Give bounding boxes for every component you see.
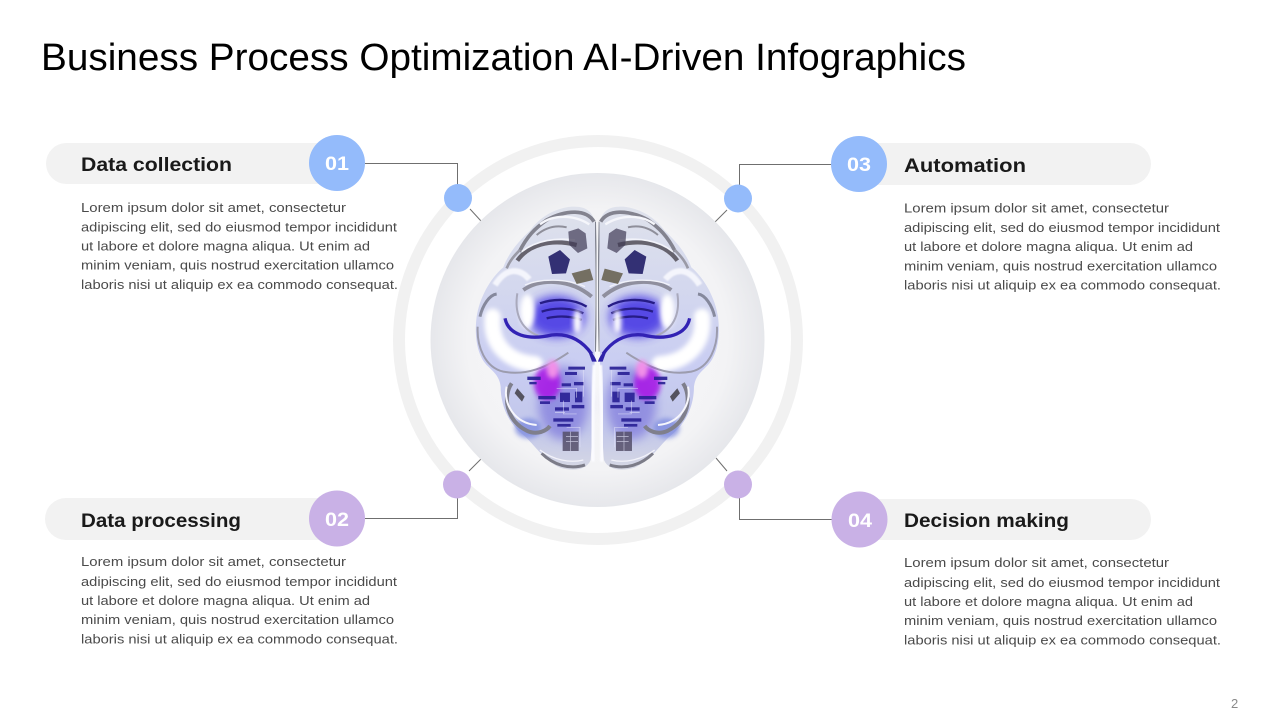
body text: ut labore et dolore magna aliqua. Ut enim ad: [904, 594, 1193, 609]
number badge 03: [831, 136, 887, 192]
number badge 04: [832, 492, 888, 548]
hub dot: bottom right: [724, 470, 752, 498]
connector: node 03 to hub: [715, 164, 832, 222]
body text: laboris nisi ut aliquip ex ea commodo consequat.: [904, 632, 1221, 647]
panel: decision making: [832, 492, 1221, 647]
body text: Lorem ipsum dolor sit amet, consectetur: [904, 200, 1170, 216]
connector: node 04 to hub: [716, 458, 832, 520]
panel: data processing: [45, 490, 398, 646]
heading: Data processing: [81, 510, 241, 532]
body text: [904, 200, 1221, 293]
central circle backdrop: [430, 173, 764, 507]
hub dot: bottom left: [443, 470, 471, 498]
body text: ut labore et dolore magna aliqua. Ut enim ad: [81, 593, 370, 608]
body text: ut labore et dolore magna aliqua. Ut enim ad: [904, 239, 1193, 254]
hub dot: top right: [724, 184, 752, 212]
body text: Lorem ipsum dolor sit amet, consectetur: [904, 555, 1170, 570]
connector: node 01 to hub: [365, 164, 481, 221]
heading pill: [46, 143, 346, 184]
body text: minim veniam, quis nostrud exercitation ullamco: [81, 612, 394, 627]
number badge 04: 04: [848, 511, 872, 532]
heading pill: [851, 499, 1151, 540]
panel: automation: [831, 136, 1221, 293]
body text: minim veniam, quis nostrud exercitation ullamco: [904, 258, 1217, 273]
heading pill: [45, 498, 345, 540]
body text: adipiscing elit, sed do eiusmod tempor incididunt: [904, 220, 1220, 235]
body text: [81, 200, 398, 292]
heading: Decision making: [904, 510, 1069, 532]
body text: minim veniam, quis nostrud exercitation ullamco: [904, 613, 1217, 628]
page number: 2: [1231, 696, 1238, 711]
number badge 03: 03: [847, 155, 871, 176]
body text: laboris nisi ut aliquip ex ea commodo consequat.: [904, 278, 1221, 293]
number badge 01: [309, 135, 365, 191]
number badge 02: [309, 490, 365, 546]
body text: [81, 554, 398, 646]
icon: glass AI brain: [476, 207, 719, 470]
body text: [904, 555, 1221, 647]
panel: data collection: [46, 135, 398, 292]
title: Business Process Optimization AI-Driven Infographics: [41, 37, 966, 79]
heading pill: [851, 143, 1151, 185]
hub dot: top left: [444, 184, 472, 212]
body text: adipiscing elit, sed do eiusmod tempor incididunt: [904, 575, 1220, 590]
body text: adipiscing elit, sed do eiusmod tempor incididunt: [81, 219, 397, 234]
heading: Automation: [904, 155, 1026, 177]
body text: laboris nisi ut aliquip ex ea commodo consequat.: [81, 631, 398, 646]
number badge 01: 01: [325, 154, 349, 175]
body text: ut labore et dolore magna aliqua. Ut enim ad: [81, 238, 370, 254]
body text: laboris nisi ut aliquip ex ea commodo consequat.: [81, 277, 398, 292]
connector: node 02 to hub: [365, 459, 481, 518]
body text: Lorem ipsum dolor sit amet, consectetur: [81, 200, 347, 215]
body text: Lorem ipsum dolor sit amet, consectetur: [81, 554, 347, 569]
body text: minim veniam, quis nostrud exercitation ullamco: [81, 258, 394, 273]
number badge 02: 02: [325, 510, 349, 531]
decorative ring around brain: [399, 141, 797, 539]
body text: adipiscing elit, sed do eiusmod tempor incididunt: [81, 574, 397, 589]
heading: Data collection: [81, 154, 232, 176]
